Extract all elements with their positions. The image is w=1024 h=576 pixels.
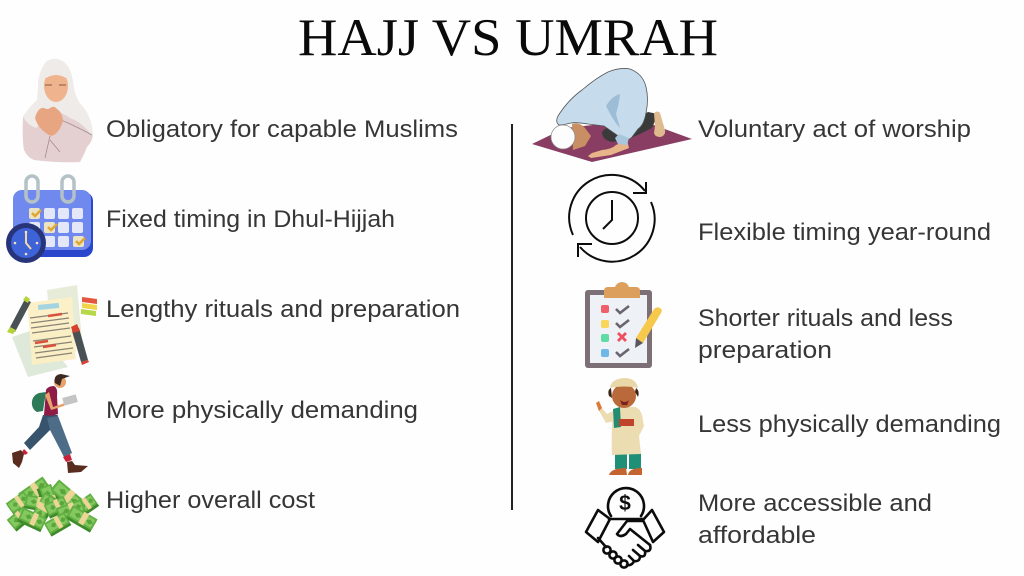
text: voluntary: Voluntary act of worship (698, 116, 971, 143)
text: less demanding: Less physically demanding (698, 411, 1001, 438)
title: HAJJ VS UMRAH (298, 9, 718, 67)
text: shorter rituals: Shorter rituals and less (698, 305, 953, 332)
icon: papers and highlighters (7, 285, 97, 377)
text: more accessible: More accessible and (698, 490, 932, 517)
text: fixed timing: Fixed timing in Dhul-Hijjah (106, 206, 395, 233)
text: more demanding: More physically demanding (106, 397, 418, 424)
icon: clipboard checklist with pencil (585, 282, 662, 368)
left column text (106, 116, 460, 514)
icon: clock with circular arrows (569, 175, 655, 262)
text: higher cost: Higher overall cost (106, 487, 315, 514)
right column text (698, 116, 1001, 549)
icon: handshake with dollar coin: $ (619, 492, 631, 515)
text: lengthy rituals: Lengthy rituals and preparation (106, 296, 460, 323)
icon: praying woman (23, 59, 93, 162)
icon: handshake with dollar coin (586, 488, 664, 568)
icon: man prostrating on mat (532, 68, 692, 162)
icon: boy pointing (596, 378, 644, 475)
text: flexible timing: Flexible timing year-round (698, 219, 991, 246)
center divider (511, 124, 513, 510)
icon: pile of money (6, 476, 99, 537)
icon: walking man with backpack (12, 374, 88, 473)
text: preparation: preparation (698, 337, 832, 364)
text: affordable: affordable (698, 522, 816, 549)
icon: calendar with clock (6, 176, 93, 263)
text: obligatory: Obligatory for capable Muslims (106, 116, 458, 143)
